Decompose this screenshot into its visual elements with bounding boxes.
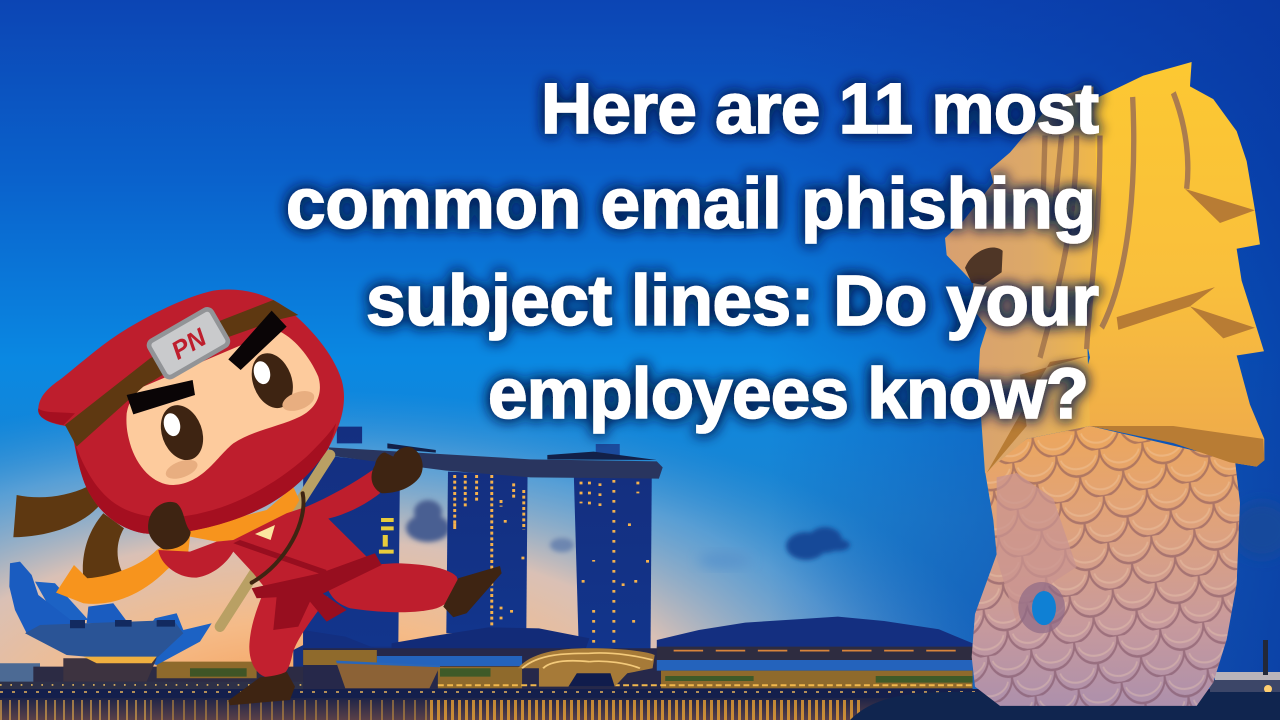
- body and arms: [158, 470, 380, 590]
- warm promenade: [303, 650, 973, 688]
- headband tails: [13, 487, 127, 597]
- title: employees know?: [488, 355, 1089, 434]
- right shore building: [1210, 640, 1280, 702]
- head hood: [38, 290, 344, 534]
- blue canopy: [377, 656, 973, 671]
- orange scarf: [56, 487, 299, 604]
- collar: [255, 525, 275, 540]
- raised hand: [371, 447, 423, 493]
- title: common email phishing: [286, 165, 1096, 244]
- merlion mane: [1080, 62, 1264, 467]
- theatre roof: [392, 627, 589, 650]
- convention centre roof: [657, 617, 973, 650]
- tail fin and hole: [997, 473, 1077, 623]
- sword on back: [220, 455, 330, 627]
- merlion body with scales: [972, 426, 1240, 706]
- merlion face: [945, 86, 1097, 473]
- cheek blush: [163, 387, 317, 483]
- headband plate with PN: PN: [167, 323, 212, 365]
- hood shading: [38, 408, 336, 534]
- standing leg: [249, 597, 328, 678]
- lit lower storey: [303, 648, 973, 692]
- eyes: [154, 347, 300, 466]
- feet: [228, 566, 502, 705]
- clouds: [406, 500, 1280, 568]
- merlion statue: [945, 62, 1264, 706]
- mane grooves and ledges: [1040, 93, 1188, 358]
- belt and sash: [233, 540, 382, 630]
- title: subject lines: Do your: [366, 262, 1099, 341]
- lower hand: [148, 502, 191, 549]
- crystal pavilion: [336, 662, 440, 688]
- shoreline promenade lights: [0, 689, 1280, 698]
- eyebrows: [127, 311, 287, 414]
- tower three: [574, 477, 652, 653]
- artscience museum: [9, 562, 212, 682]
- ninja mascot: [13, 290, 502, 705]
- skyline: Marina Bay Sands and waterfront: [303, 427, 973, 692]
- headband: [65, 300, 298, 447]
- glass dome pavilion: [518, 648, 655, 687]
- foreground stone platform: [850, 692, 1280, 720]
- tower two: [446, 472, 528, 633]
- headband plate with PN: [147, 307, 230, 379]
- title: [286, 70, 1099, 434]
- title: Here are 11 most: [541, 70, 1099, 149]
- merlion mouth: [965, 247, 1003, 285]
- kicking leg: [323, 563, 458, 612]
- sword strap: [252, 493, 304, 583]
- left waterfront buildings: [0, 630, 520, 693]
- tower one: [303, 427, 400, 647]
- left pavilion roof: [303, 630, 375, 648]
- window lights: [379, 475, 648, 647]
- water with reflections: [0, 698, 1280, 720]
- sky park deck: [328, 447, 663, 479]
- face: [126, 330, 320, 485]
